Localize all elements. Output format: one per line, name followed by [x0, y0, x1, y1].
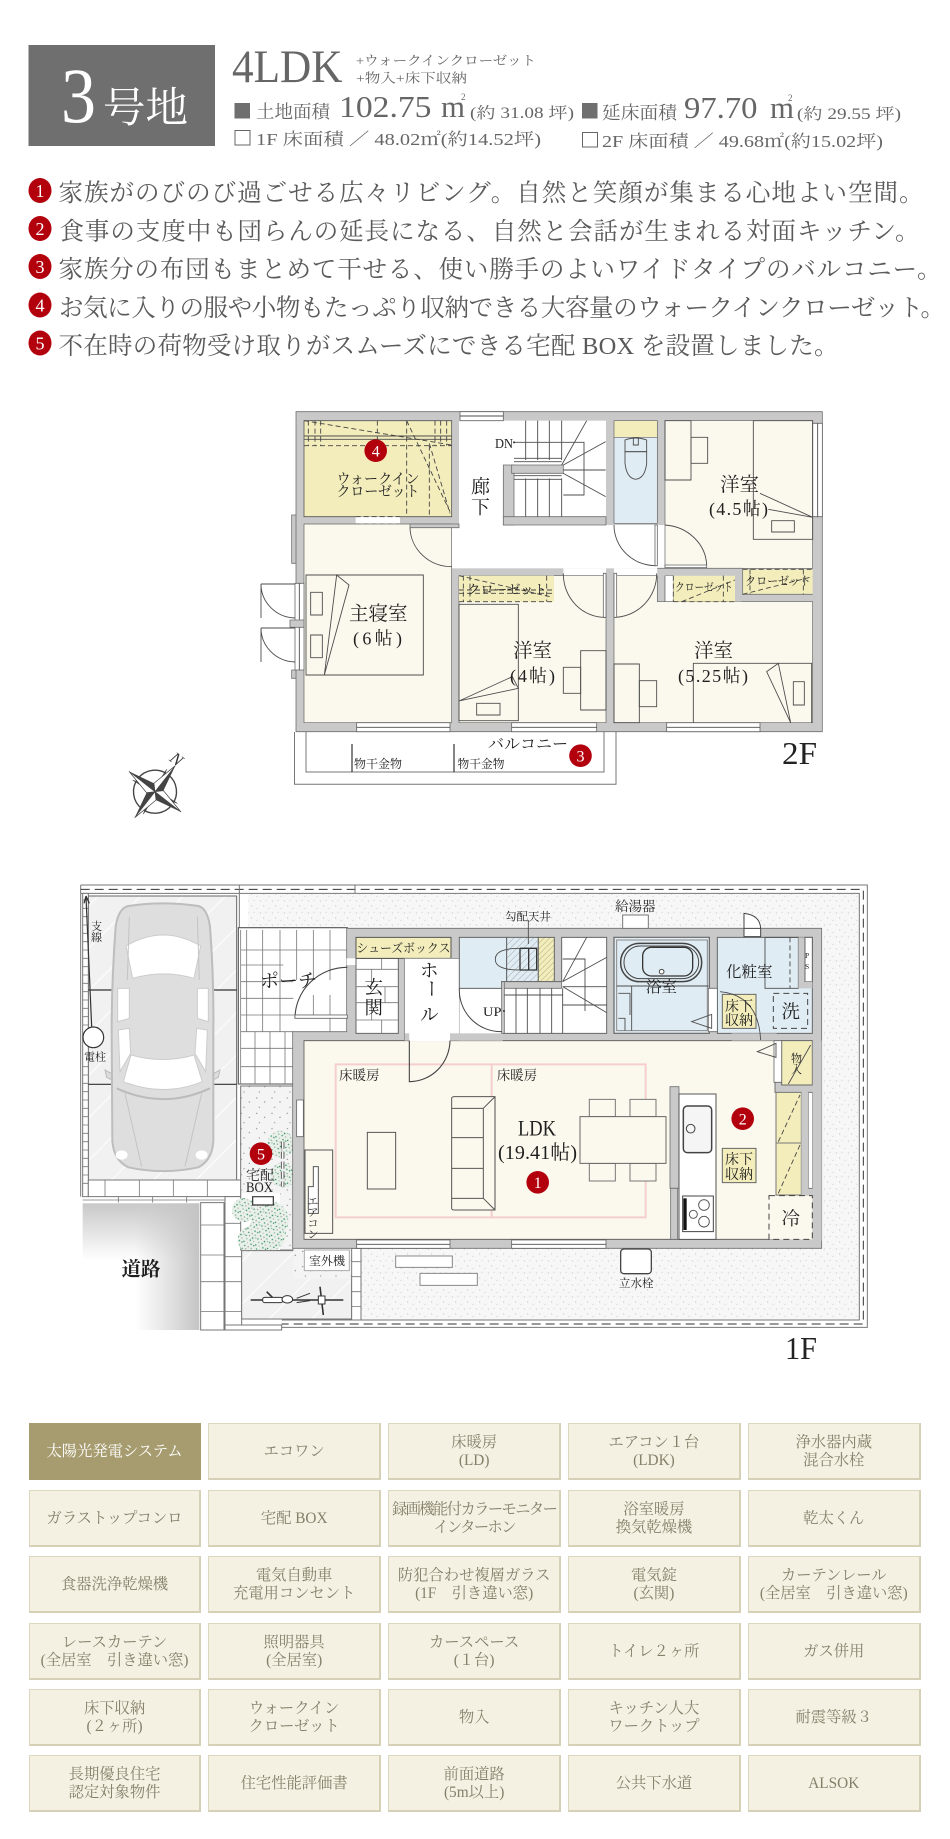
equipment: car space: カースペース: [429, 1634, 519, 1651]
equipment: worktop: キッチン人大: [609, 1700, 699, 1717]
1F labels: UP: [483, 1004, 502, 1019]
badge 1: [526, 1171, 549, 1194]
header: total floor area: [582, 90, 901, 125]
equipment: floor heating: [388, 1423, 561, 1480]
1F labels: 収納: [725, 1167, 753, 1183]
sofa: [452, 1097, 495, 1210]
1F labels: 入: [791, 1063, 802, 1076]
header: land area: 土地面積: [256, 102, 332, 122]
car space: [88, 896, 237, 1180]
2F room labels: (4帖): [510, 666, 555, 687]
badge 1: 1: [534, 1175, 542, 1192]
feature list: [28, 178, 945, 360]
garden: [241, 1086, 293, 1250]
equipment: bath dryer: [568, 1490, 741, 1547]
equipment: lighting: (全居室): [266, 1652, 322, 1669]
2F room labels: 洋室: [513, 640, 552, 662]
1F labels: 玄: [364, 978, 384, 999]
feature 2: 2: [36, 219, 44, 239]
equipment: glass top stove: [29, 1490, 201, 1547]
bath: [614, 937, 709, 1033]
WC: [614, 421, 657, 437]
feature 4: お気に入りの服や小物もたっぷり収納できる大容量のウォークインクローゼット。: [59, 294, 945, 322]
equipment: air conditioner: [568, 1423, 741, 1480]
equipment: worktop: ワークトップ: [608, 1718, 700, 1735]
equipment: kanta-kun: [748, 1490, 920, 1547]
2F room labels: 下: [471, 496, 490, 518]
equipment: delivery box: [208, 1490, 381, 1547]
1F labels: ア: [308, 1207, 318, 1219]
header: land area: [234, 89, 574, 124]
1F labels: 関: [364, 998, 383, 1019]
hall: [404, 958, 459, 1041]
equipment: earthquake grade: 耐震等級３: [796, 1709, 872, 1726]
header: land area: m: [441, 89, 465, 124]
badge 4: [364, 439, 387, 462]
equipment: solar: [29, 1423, 201, 1480]
furniture room 4: [459, 604, 518, 721]
header: total floor area: (約 29.55 坪): [797, 105, 901, 123]
equipment: ALSOK: [748, 1755, 920, 1812]
storage: [782, 1041, 812, 1085]
equipment: kanta-kun: 乾太くん: [803, 1510, 864, 1527]
equipment: sewer: [568, 1755, 741, 1812]
wash room: [717, 937, 812, 1033]
equipment: lace curtain: レースカーテン: [62, 1634, 167, 1651]
LDK: [304, 1041, 776, 1239]
balcony: バルコニー: [488, 736, 568, 753]
equipment: storage: [388, 1689, 561, 1746]
1F labels: 支: [91, 919, 102, 933]
gravel: [248, 894, 859, 1320]
equipment: earthquake grade: [748, 1689, 920, 1746]
TV cabinet: [305, 1150, 333, 1233]
equipment: underfloor storage: 床下収納: [84, 1700, 145, 1717]
header: layout type: 4LDK: [232, 41, 343, 93]
2F room labels: クローゼット: [336, 484, 420, 500]
1F labels: BOX: [246, 1180, 273, 1196]
equipment: floor heating: 床暖房: [451, 1434, 497, 1451]
equipment: front road: (5m以上): [444, 1784, 504, 1801]
feature 5: 5: [36, 334, 44, 354]
header: land area: (約 31.08 坪): [470, 104, 574, 122]
equipment: two toilets: トイレ２ヶ所: [608, 1643, 699, 1660]
1F labels: 冷: [782, 1209, 800, 1230]
equipment: sewer: 公共下水道: [616, 1775, 692, 1792]
2F room labels: クローゼット: [675, 581, 733, 594]
1F labels: 立水栓: [619, 1276, 654, 1290]
equipment: intercom: [388, 1490, 561, 1547]
header: lot number box: 3: [61, 52, 96, 139]
header: total floor area: 延床面積: [602, 102, 679, 123]
header: 2F floor area: 2F 床面積 ／ 49.68㎡(約15.02坪): [602, 132, 883, 151]
equipment: lighting: 照明器具: [264, 1634, 325, 1651]
1F labels: 室外機: [309, 1253, 346, 1268]
equipment: lighting: [208, 1623, 381, 1680]
floor heating: [336, 1064, 646, 1217]
2F room labels: 主寝室: [349, 603, 408, 625]
badge 2: 2: [739, 1112, 747, 1128]
WIC shelves: [304, 436, 452, 439]
1F labels: 線: [91, 931, 102, 944]
dining: [589, 1099, 615, 1117]
lot boundary: [81, 885, 867, 1327]
equipment: security glass: [388, 1556, 561, 1613]
equipment: security glass: 防犯合わせ複層ガラス: [398, 1567, 550, 1584]
1F labels: [84, 899, 817, 1366]
equipment: front road: [388, 1755, 561, 1812]
2F room labels: 洋室: [720, 474, 759, 496]
badge 3: 3: [576, 748, 584, 766]
1F labels: ン: [308, 1229, 318, 1241]
equipment: lace curtain: [29, 1623, 201, 1680]
badge 5: 5: [257, 1146, 265, 1164]
2F rooms and walls: [261, 412, 822, 732]
equipment: curtain rail: カーテンレール: [781, 1567, 887, 1584]
1F labels: 宅配: [246, 1167, 274, 1184]
1F labels: 勾配天井: [505, 910, 551, 924]
equipment: intercom: インターホン: [433, 1519, 515, 1536]
badge 4: 4: [372, 444, 380, 460]
1F labels: コ: [308, 1218, 318, 1230]
equipment: storage: 物入: [459, 1709, 489, 1726]
1F labels: 床暖房: [339, 1067, 380, 1083]
equipment: floor heating: (LD): [459, 1452, 489, 1469]
equipment: car space: (１台): [454, 1652, 495, 1669]
equipment: air conditioner: エアコン１台: [608, 1434, 699, 1451]
table in LD: [367, 1132, 396, 1189]
master bedroom: [304, 524, 452, 723]
kitchen: [670, 1087, 679, 1188]
2F room labels: クローゼット: [467, 582, 547, 597]
1F labels: 道路: [122, 1258, 161, 1280]
2F room labels: ウォークイン: [336, 472, 420, 488]
1F labels: (19.41帖): [498, 1141, 577, 1164]
stairs: [503, 465, 514, 525]
1F labels: ポーチ: [260, 971, 317, 992]
equipment: long-life housing: 長期優良住宅: [69, 1766, 160, 1783]
equipment: performance evaluation: 住宅性能評価書: [241, 1775, 348, 1792]
room 4: [459, 576, 606, 723]
compass north mark: N: [165, 748, 188, 771]
icon: bicycle: [251, 1287, 343, 1315]
genkan: [347, 958, 356, 965]
1F labels: 電柱: [84, 1050, 106, 1064]
equipment: gas: [748, 1623, 920, 1680]
2F room labels: (5.25帖): [678, 666, 748, 687]
equipment: walk-in closet: [208, 1689, 381, 1746]
1F labels: S: [805, 962, 809, 971]
balcony: 物干金物: [354, 756, 402, 771]
closet dashes: [459, 576, 554, 602]
equipment: walk-in closet: ウォークイン: [249, 1700, 339, 1717]
equipment: underfloor storage: (２ヶ所): [86, 1718, 143, 1735]
floor plan: 1F: [81, 885, 867, 1366]
1F labels: 化粧室: [726, 963, 773, 981]
2F room labels: 廊: [471, 476, 490, 498]
equipment: electric lock: (玄関): [634, 1585, 674, 1602]
water heater, hydrant, door: [623, 915, 648, 928]
feature 1: 1: [36, 181, 44, 201]
equipment: faucet: 浄水器内蔵: [796, 1434, 872, 1451]
equipment: ecowan: エコワン: [264, 1443, 325, 1460]
header: total floor area: 97.70: [684, 90, 758, 125]
1F labels: ル: [420, 1006, 439, 1026]
2F room labels: 洋室: [694, 640, 733, 662]
1F labels: 床下: [725, 1151, 753, 1168]
badge 5: [250, 1142, 272, 1165]
feature 4: 4: [36, 296, 44, 316]
equipment: car space: [388, 1623, 561, 1680]
toilet: [625, 438, 647, 452]
equipment: glass top stove: ガラストップコンロ: [47, 1510, 183, 1527]
header: total floor area: 2: [788, 93, 792, 103]
equipment: EV outlet: [208, 1556, 381, 1613]
equipment: curtain rail: [748, 1556, 920, 1613]
1F labels: エ: [308, 1196, 318, 1208]
equipment: delivery box: 宅配 BOX: [261, 1510, 328, 1527]
2F room labels: クローゼット: [745, 574, 811, 588]
1F labels: 収納: [725, 1013, 753, 1029]
equipment: walk-in closet: クローゼット: [249, 1718, 340, 1735]
LDK door: [409, 1041, 450, 1082]
furniture room 4.5 and 5.25: [614, 421, 813, 723]
equipment: dishwasher: [29, 1556, 201, 1613]
badge 2: [731, 1107, 754, 1130]
1F labels: LDK: [518, 1116, 556, 1140]
bike space: [242, 1251, 352, 1319]
equipment: electric lock: 電気錠: [631, 1567, 677, 1584]
porch: [238, 928, 347, 1084]
equipment: faucet: 混合水栓: [803, 1452, 864, 1469]
equipment: long-life housing: [29, 1755, 201, 1812]
2F room labels: (4.5帖): [709, 499, 768, 520]
equipment: security glass: (1F 引き違い窓): [415, 1585, 533, 1602]
1F labels: ー: [420, 979, 440, 998]
feature 1: 家族がのびのび過ごせる広々リビング。自然と笑顔が集まる心地よい空間。: [58, 179, 924, 207]
equipment: worktop: [568, 1689, 741, 1746]
1F labels: 洗: [782, 1002, 800, 1023]
windows: [460, 412, 503, 421]
1F labels: P: [805, 951, 809, 960]
floor plan: 2F: [261, 412, 822, 784]
header: land area: 102.75: [339, 89, 432, 124]
feature 5: 不在時の荷物受け取りがスムーズにできる宅配 BOX を設置しました。: [58, 332, 838, 360]
equipment: EV outlet: 電気自動車: [256, 1567, 332, 1584]
header: layout type: +物入+床下収納: [356, 70, 467, 86]
icon: compass: [109, 745, 201, 838]
WC 1F: [459, 937, 507, 988]
feature 2: 食事の支度中も団らんの延長になる、自然と会話が生まれる対面キッチン。: [60, 218, 920, 246]
icon: car: [105, 903, 220, 1171]
WIC: [304, 421, 452, 517]
equipment: performance evaluation: [208, 1755, 381, 1812]
furniture master: [306, 575, 423, 675]
1F labels: シューズボックス: [356, 942, 450, 956]
2F label: 2F: [782, 735, 817, 771]
equipment: curtain rail: (全居室 引き違い窓): [760, 1585, 908, 1602]
road: [83, 1203, 199, 1330]
header: total floor area: m: [770, 90, 794, 125]
header: layout type: [232, 41, 536, 93]
equipment: ecowan: [208, 1423, 381, 1480]
header: lot number box: [28, 45, 215, 146]
stairs 1F: [503, 988, 607, 1033]
equipment: gas: ガス併用: [803, 1643, 864, 1660]
header: layout type: +ウォークインクローゼット: [356, 53, 536, 68]
equipment: underfloor storage: [29, 1689, 201, 1746]
equipment: solar: 太陽光発電システム: [46, 1443, 183, 1460]
1F labels: 浴室: [646, 978, 677, 996]
2F room labels: [336, 436, 811, 687]
feature 3: 家族分の布団もまとめて干せる、使い勝手のよいワイドタイプのバルコニー。: [58, 256, 942, 284]
doors: [410, 525, 707, 617]
equipment: bath dryer: 浴室暖房: [623, 1501, 685, 1518]
header: land area: 2: [461, 92, 466, 102]
equipment: electric lock: [568, 1556, 741, 1613]
equipment: ALSOK: ALSOK: [808, 1775, 859, 1792]
hall: [459, 421, 606, 525]
equipment: front road: 前面道路: [444, 1766, 505, 1783]
room 4.5: [665, 421, 813, 568]
2F room labels: DN: [495, 436, 513, 451]
badge 3: [569, 744, 592, 767]
1F labels: 給湯器: [615, 899, 656, 914]
equipment: lace curtain: (全居室 引き違い窓): [41, 1652, 188, 1669]
room 5.25: [614, 576, 813, 723]
1F site and building: [81, 885, 867, 1330]
1F labels: 物: [791, 1051, 802, 1065]
windows: [357, 1240, 450, 1248]
balcony: 物干金物: [458, 756, 504, 771]
1F labels: ホ: [420, 962, 439, 982]
equipment: faucet: [748, 1423, 920, 1480]
equipment grid: [29, 1423, 921, 1812]
1F labels: 床暖房: [497, 1067, 537, 1083]
equipment: bath dryer: 換気乾燥機: [616, 1519, 692, 1536]
pole and guy wire: [84, 896, 92, 1027]
equipment: two toilets: [568, 1623, 741, 1680]
equipment: EV outlet: 充電用コンセント: [233, 1585, 355, 1602]
feature 3: 3: [36, 257, 44, 277]
equipment: dishwasher: 食器洗浄乾燥機: [61, 1576, 168, 1593]
balcony: [294, 732, 616, 784]
equipment: intercom: 録画機能付カラーモニター: [392, 1501, 556, 1518]
header: 1F floor area: 1F 床面積 ／ 48.02㎡(約14.52坪): [256, 130, 541, 149]
header: lot number box: 号地: [103, 86, 188, 132]
2F room labels: (6帖): [353, 628, 402, 650]
1F labels: 床下: [725, 998, 753, 1015]
equipment: long-life housing: 認定対象物件: [69, 1784, 160, 1801]
equipment: air conditioner: (LDK): [633, 1452, 675, 1469]
house walls: [293, 928, 822, 1248]
1F labels: 1F: [785, 1330, 817, 1366]
